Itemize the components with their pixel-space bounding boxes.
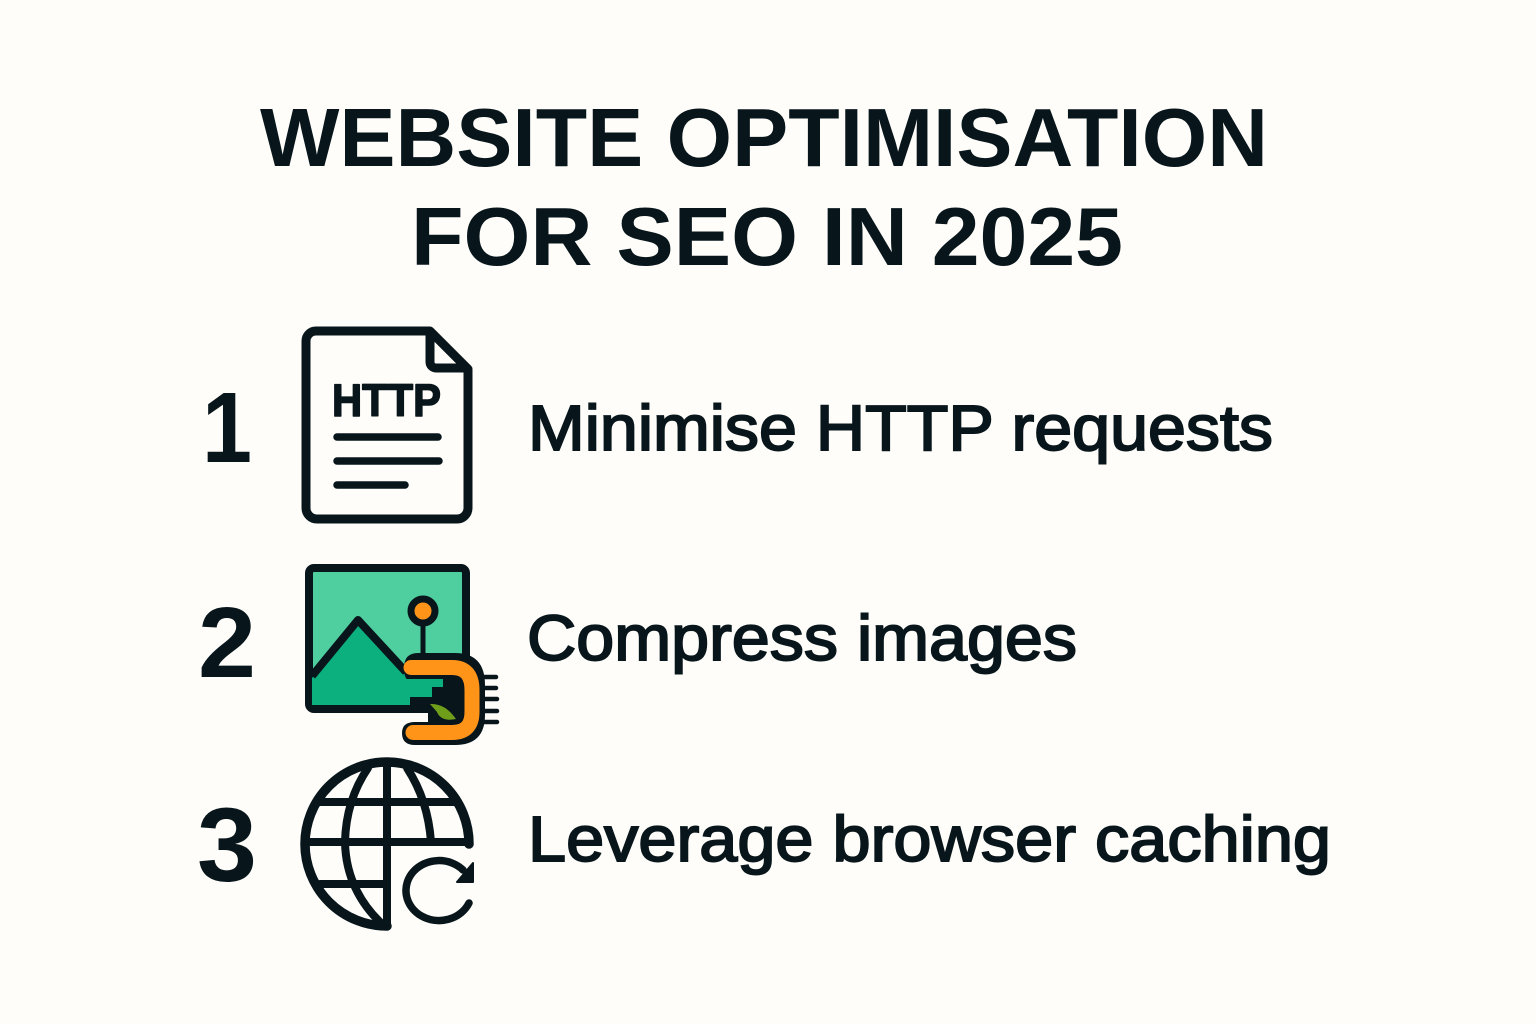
title: WEBSITE OPTIMISATION xyxy=(260,91,1268,184)
icon: compressed image with clamp xyxy=(309,568,497,745)
label: Compress images: Compress images xyxy=(527,602,1077,674)
label: Minimise HTTP requests: Minimise HTTP requests xyxy=(528,392,1273,464)
number 3: 3 xyxy=(197,787,257,904)
icon: HTTP document: HTTP xyxy=(332,375,441,426)
icon: globe with refresh arrow xyxy=(305,762,473,926)
title xyxy=(260,91,1268,283)
icon: HTTP document xyxy=(306,331,468,519)
number 1: 1 xyxy=(202,372,252,484)
number 2: 2 xyxy=(198,587,256,699)
title: FOR SEO IN 2025 xyxy=(411,190,1123,283)
label: Leverage browser caching: Leverage browser caching xyxy=(528,803,1331,875)
clamp xyxy=(402,653,497,745)
